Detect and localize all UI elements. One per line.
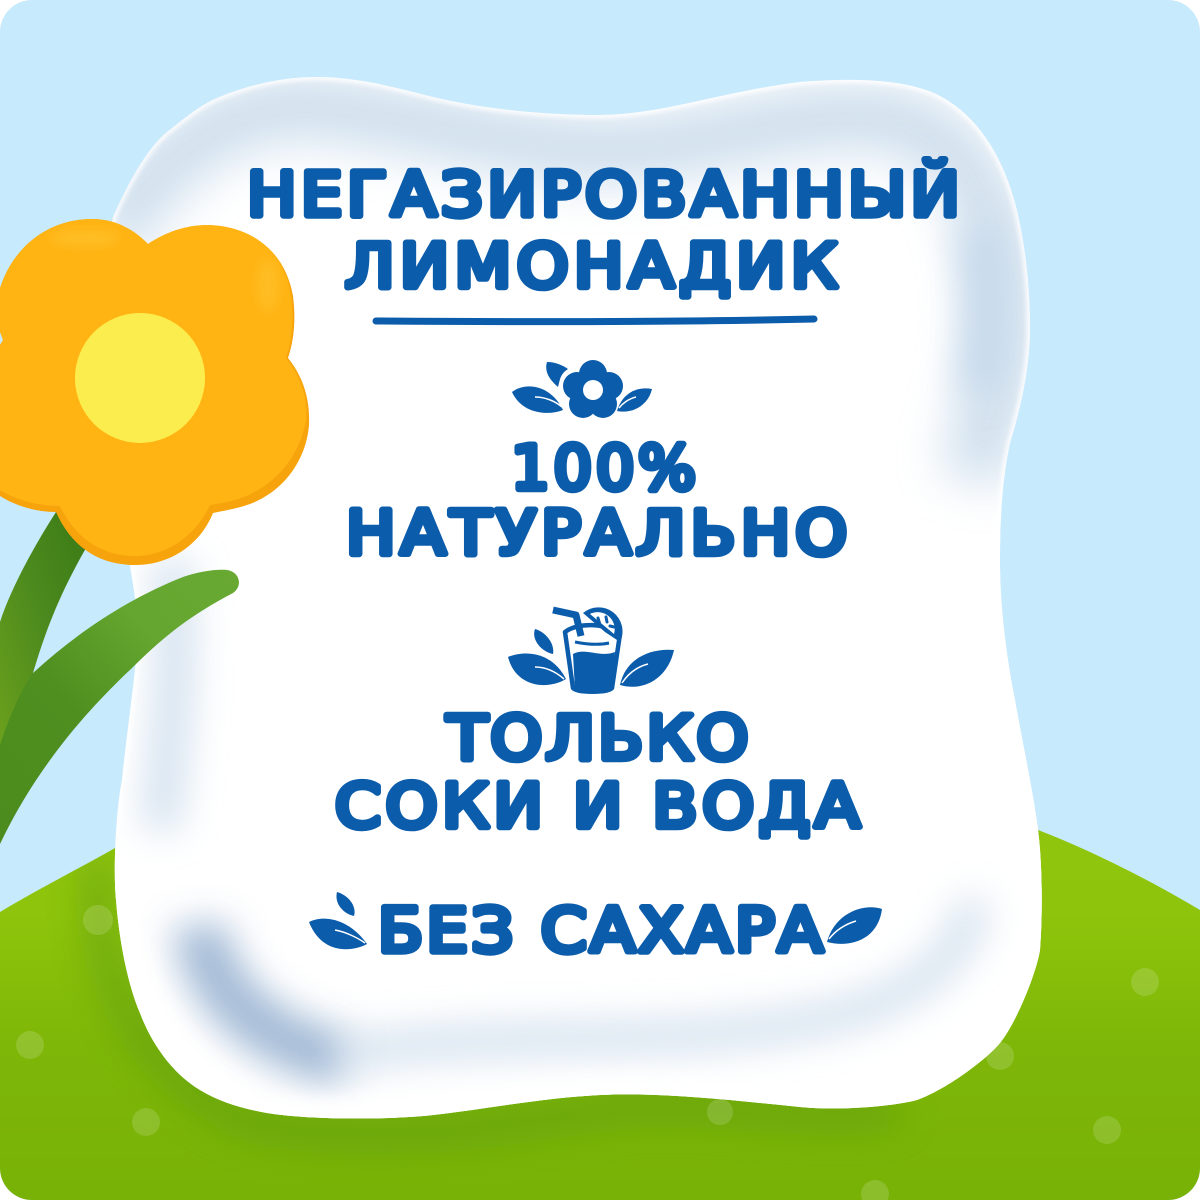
text: no sugar: БЕЗ САХАРА — [378, 895, 823, 966]
flower leaf — [0, 570, 239, 844]
heading: НЕГАЗИРОВАННЫЙ — [247, 158, 960, 230]
flower centre — [75, 313, 205, 443]
flower stem — [0, 512, 85, 745]
icon: flower with leaves — [512, 360, 652, 418]
white rim — [109, 77, 1042, 1119]
text: naturally: НАТУРАЛЬНО — [346, 497, 847, 568]
text: juices and water: СОКИ И ВОДА — [335, 770, 860, 841]
hill dots — [16, 905, 1159, 1200]
flower — [0, 219, 309, 844]
icon: left leaves — [309, 892, 367, 949]
lemon — [583, 607, 623, 642]
heading: ЛИМОНАДИК — [345, 230, 837, 301]
hill shading — [98, 860, 900, 1133]
straw — [553, 610, 581, 636]
icon: right leaf — [827, 907, 882, 944]
heading — [247, 158, 960, 301]
green hill — [0, 790, 1200, 1200]
text: 100%: 100% — [511, 433, 696, 504]
glass — [565, 625, 620, 692]
icon: glass with lemon and leaves — [508, 607, 674, 693]
text: only: ТОЛЬКО — [446, 702, 748, 773]
white card with soft shading — [109, 77, 1042, 1119]
leaves — [508, 654, 566, 685]
flower petals — [0, 219, 309, 565]
heading underline — [376, 319, 814, 322]
